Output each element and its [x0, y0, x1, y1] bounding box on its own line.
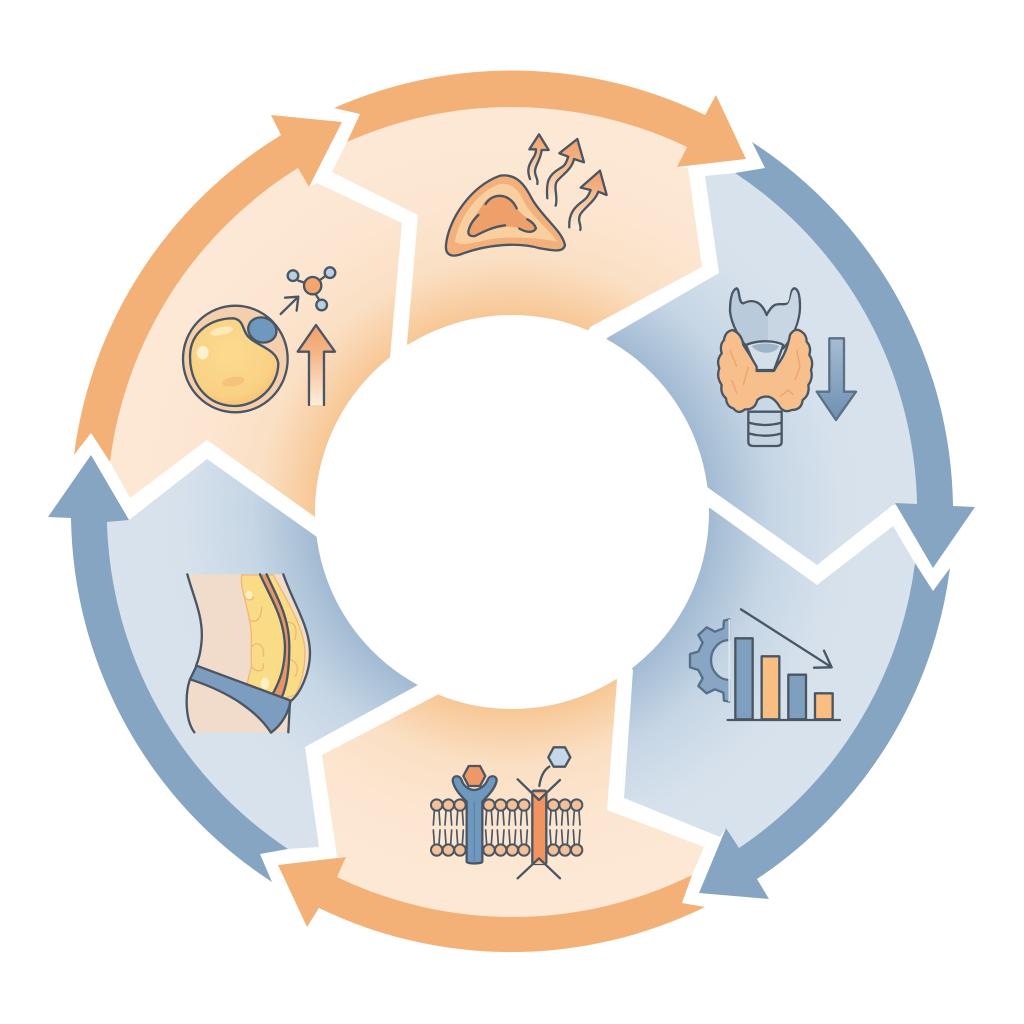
arrow: lower right blue — [699, 563, 950, 899]
icon: abdomen cross-section with visceral fat — [187, 574, 310, 733]
panel: lower left abdominal fat segment — [107, 459, 512, 849]
centre circle — [315, 315, 709, 709]
icon: adrenal gland with rising arrows — [446, 134, 607, 256]
arrow: top orange — [334, 71, 746, 167]
panel: right thyroid segment — [512, 173, 917, 565]
panel: bottom receptor segment — [322, 512, 704, 918]
panel: lower right metabolism segment — [512, 508, 915, 848]
arrow: bottom orange — [278, 857, 705, 952]
icon: fat cell with molecule and up arrow — [183, 267, 335, 412]
icon: cell membrane with receptor and channel — [431, 747, 582, 878]
icon: gear and declining bar chart — [690, 609, 840, 720]
arrow: upper left orange — [74, 115, 342, 462]
arrow: right blue — [735, 142, 975, 568]
panel: upper left fat cell segment — [110, 168, 512, 517]
icon: thyroid with down arrow — [718, 288, 856, 446]
arrow: lower left blue — [48, 455, 288, 882]
panel: top adrenal gland segment — [332, 107, 702, 512]
